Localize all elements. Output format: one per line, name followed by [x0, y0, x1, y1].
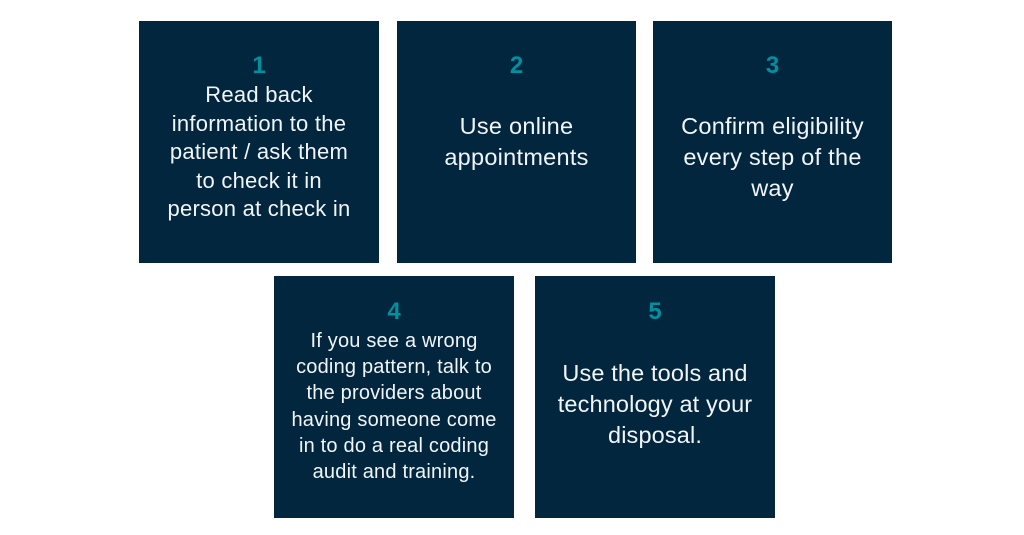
panel: step 4 [274, 276, 514, 518]
text: step 4: in to do a real coding [299, 435, 489, 457]
text: step 1: to check it in [196, 168, 322, 193]
text: step 2: Use online [460, 113, 573, 139]
text: step 3: every step of the [683, 144, 862, 170]
number 4: 4 [387, 298, 401, 325]
text: step 4: the providers about [306, 382, 482, 404]
text: step 4 [291, 330, 497, 483]
number 2: 2 [510, 52, 523, 79]
panel: step 1 [139, 21, 379, 263]
text: step 5: disposal. [608, 422, 702, 448]
text: step 1: patient / ask them [170, 139, 348, 164]
text: step 5: technology at your [558, 391, 752, 417]
number 3: 3 [766, 52, 779, 79]
text: step 3: Confirm eligibility [681, 113, 864, 139]
text: step 2: appointments [444, 144, 589, 170]
text: step 4: audit and training. [313, 461, 475, 483]
text: step 4: having someone come [291, 409, 497, 431]
number 1: 1 [252, 52, 266, 79]
text: step 1: Read back [205, 82, 313, 107]
panel: step 5 [535, 276, 775, 518]
panel: step 2 [397, 21, 636, 263]
text: step 3 [681, 113, 864, 201]
text: step 5 [558, 360, 752, 448]
text: step 4: If you see a wrong [310, 330, 478, 352]
text: step 1: person at check in [167, 196, 351, 221]
text: step 1 [167, 82, 351, 221]
text: step 4: coding pattern, talk to [296, 356, 492, 378]
text: step 1: information to the [172, 111, 346, 136]
text: step 5: Use the tools and [562, 360, 748, 386]
number 5: 5 [648, 298, 662, 325]
text: step 3: way [751, 175, 794, 201]
text: step 2 [444, 113, 589, 170]
panel: step 3 [653, 21, 892, 263]
